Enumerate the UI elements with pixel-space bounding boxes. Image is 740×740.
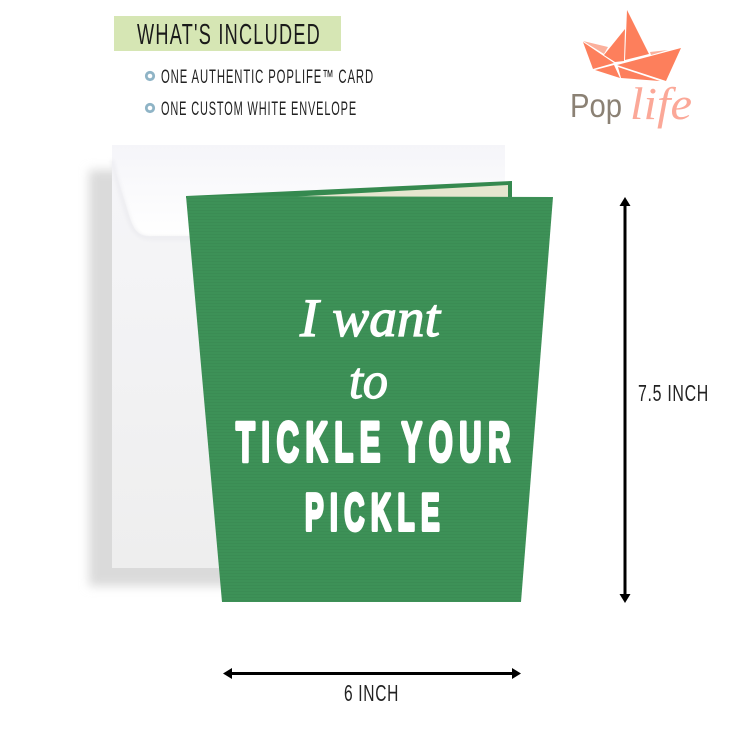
envelope flap <box>112 145 505 236</box>
envelope shadow <box>89 170 239 586</box>
item: one authentic card: ONE AUTHENTIC POPLIFE™ CARD <box>161 67 374 88</box>
message line: tickle your: TICKLE YOUR <box>236 410 517 473</box>
heading: what's included: WHAT'S INCLUDED <box>137 19 321 51</box>
heading: what's included <box>114 16 341 51</box>
item: one custom envelope <box>146 99 357 120</box>
width arrow: 6 inch <box>223 668 521 706</box>
width arrow: 6 inch: 6 INCH <box>344 680 399 706</box>
card front <box>186 196 553 602</box>
wordmark: Pop: Pop <box>570 87 622 124</box>
item: one custom envelope: ONE CUSTOM WHITE ENVELOPE <box>161 99 357 120</box>
envelope <box>89 145 505 586</box>
message line: pickle: PICKLE <box>305 484 446 542</box>
card message <box>236 288 517 542</box>
logo: Poplife paper boat <box>570 10 692 129</box>
card inner page <box>288 185 508 197</box>
greeting card <box>186 181 553 602</box>
wordmark: life: life <box>630 78 692 129</box>
envelope body <box>112 145 505 568</box>
item: one authentic card <box>146 67 374 88</box>
height arrow: 7.5 inch: 7.5 INCH <box>638 380 709 406</box>
message line: to: to <box>349 353 388 410</box>
icon: paper boat <box>583 10 681 81</box>
height arrow: 7.5 inch <box>620 197 709 603</box>
card back panel <box>186 181 512 198</box>
message line: I want: I want <box>299 288 442 348</box>
list of included items <box>146 67 374 120</box>
